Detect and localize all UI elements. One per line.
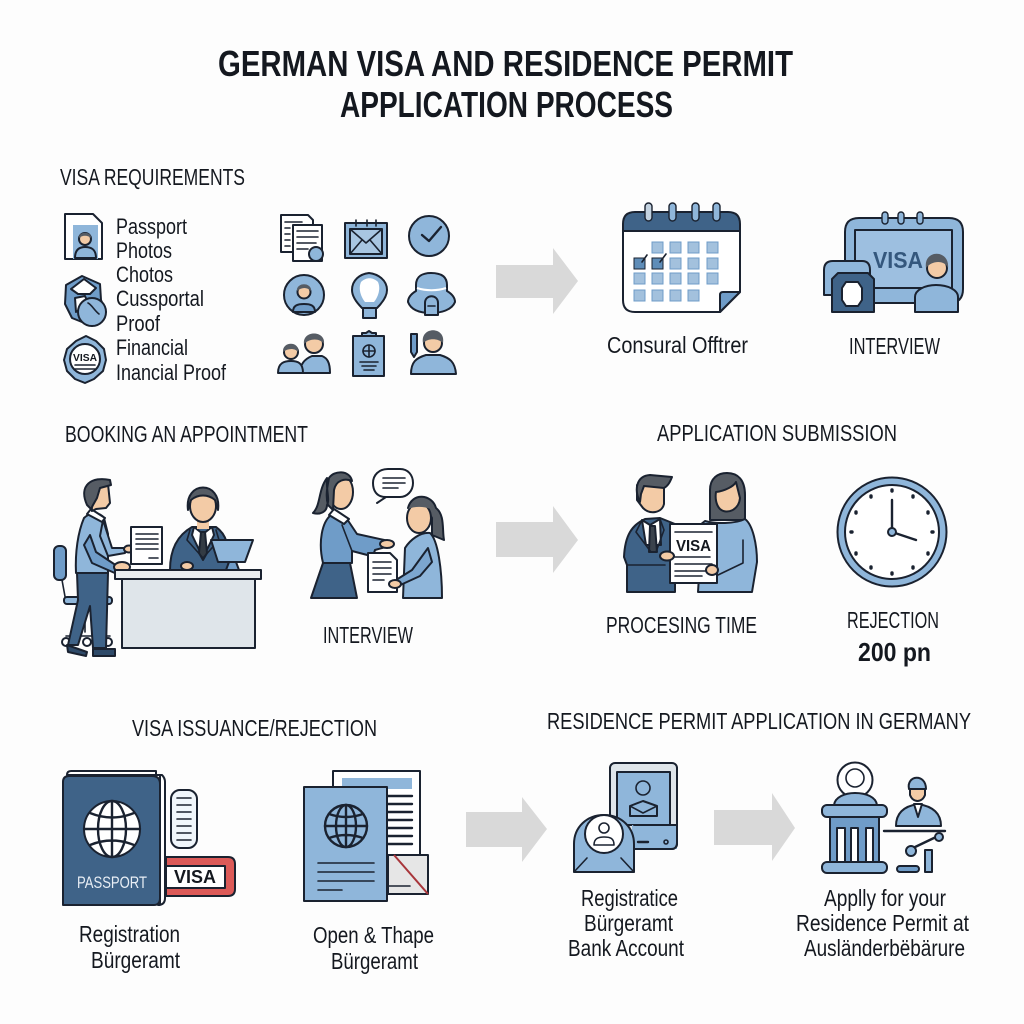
- requirement list text: Passport: [116, 214, 187, 239]
- requirement list text: Chotos: [116, 262, 173, 287]
- icon: light bulb: [352, 273, 387, 318]
- label: burgeramt: Bürgeramt: [331, 948, 418, 974]
- label: open and thape: Open & Thape: [313, 922, 434, 948]
- label: interview: INTERVIEW: [849, 333, 940, 359]
- illustration: standing man: [67, 479, 134, 656]
- arrow: row 3 first: [466, 797, 547, 862]
- icon: passport photo: [65, 214, 102, 259]
- label: rejection: REJECTION: [847, 607, 939, 633]
- calendar cells: [634, 242, 718, 301]
- icon: white pill: [171, 790, 197, 848]
- requirement list text: Financial: [116, 335, 188, 360]
- illustration: desk: [115, 570, 261, 648]
- icon: blue document: [304, 787, 387, 901]
- illustration: chair: [54, 546, 112, 646]
- icon: hat: [408, 273, 455, 315]
- heading: visa requirements: VISA REQUIREMENTS: [60, 164, 245, 190]
- icon: envelope calendar: [345, 220, 387, 258]
- icon: user dome: [574, 815, 634, 872]
- label: apply for your: Applly for your: [824, 885, 946, 911]
- label: burgeramt: Bürgeramt: [91, 947, 181, 973]
- icon: tablet: [610, 763, 677, 849]
- panel: visa requirements: [60, 164, 456, 385]
- icon: person in circle: [284, 275, 324, 315]
- icon: clock check: [409, 216, 449, 256]
- illustration: woman left: [311, 472, 394, 598]
- title: APPLICATION PROCESS: [340, 84, 673, 125]
- icon: grey sheet: [388, 855, 428, 894]
- icon: clipboard passport: [353, 331, 384, 376]
- icon: courthouse with officials: [822, 762, 945, 873]
- label: 200 pn: 200 pn: [858, 637, 931, 667]
- illustration: woman right: [396, 497, 444, 598]
- panel: visa issuance or rejection: [63, 715, 434, 974]
- icon: person with pencil: [411, 330, 456, 374]
- requirement list text: Photos: [116, 238, 172, 263]
- icon: two people: [278, 334, 330, 373]
- arrow: row 1: [496, 248, 578, 314]
- icon grid: [278, 215, 456, 376]
- icon: visa board with person: [824, 212, 963, 312]
- icon: back paper: [333, 771, 420, 893]
- heading: application submission: APPLICATION SUBMISSION: [657, 420, 897, 446]
- label: bank account: Bank Account: [568, 935, 684, 961]
- requirement list text: Proof: [116, 311, 161, 336]
- title: [218, 43, 793, 125]
- illustration: visa paper: VISA: [676, 538, 711, 555]
- illustration: visa paper: [660, 524, 718, 583]
- icon: documents: [281, 215, 323, 261]
- heading: booking an appointment: BOOKING AN APPOINTMENT: [65, 421, 308, 447]
- arrow: row 2: [496, 506, 578, 573]
- icon: passport: PASSPORT: [77, 873, 147, 892]
- arrow: row 3 second: [714, 793, 795, 861]
- heading: visa issuance/rejection: VISA ISSUANCE/REJECTION: [132, 715, 377, 741]
- icon: calendar: [623, 203, 740, 312]
- icon: red visa ticket: VISA: [174, 867, 216, 887]
- icon: visa board with person: VISA: [873, 247, 923, 273]
- icon: speech bubble: [373, 469, 413, 503]
- panel: residence permit application: [547, 708, 971, 961]
- label: processing time: PROCESING TIME: [606, 612, 757, 638]
- panel: consular offer and interview: [607, 203, 963, 359]
- title: GERMAN VISA AND RESIDENCE PERMIT: [218, 43, 793, 84]
- label: registration: Registration: [79, 921, 180, 947]
- illustration: man in suit: [624, 475, 676, 592]
- label: interview: INTERVIEW: [323, 622, 413, 648]
- panel: booking an appointment: [54, 421, 308, 656]
- label: consural offtrer: Consural Offtrer: [607, 332, 748, 358]
- illustration: woman: [698, 473, 757, 592]
- illustration: seated clerk: [170, 488, 228, 570]
- illustration: paper handed: [368, 553, 401, 592]
- requirement list text: Cussportal: [116, 286, 204, 311]
- requirement list text: Inancial Proof: [116, 360, 227, 385]
- icon: visa badge: [64, 336, 106, 383]
- label: registratice: Registratice: [581, 885, 678, 911]
- label: burgeramt: Bürgeramt: [584, 910, 674, 936]
- panel: interview scene: [311, 469, 444, 648]
- label: auslanderbebarure: Ausländerbëbärure: [804, 935, 965, 961]
- illustration: monitor: [211, 540, 253, 570]
- requirement list text: [116, 214, 227, 385]
- illustration: paper held: [131, 527, 162, 564]
- panel: application submission: [606, 420, 946, 667]
- icon: red visa ticket: [166, 857, 235, 896]
- icon: passport: [63, 771, 165, 905]
- icon: clock: [838, 478, 946, 586]
- label: residence permit at: Residence Permit at: [796, 910, 970, 936]
- icon: customs stamp: [65, 276, 106, 326]
- icon: visa badge: VISA: [73, 353, 97, 364]
